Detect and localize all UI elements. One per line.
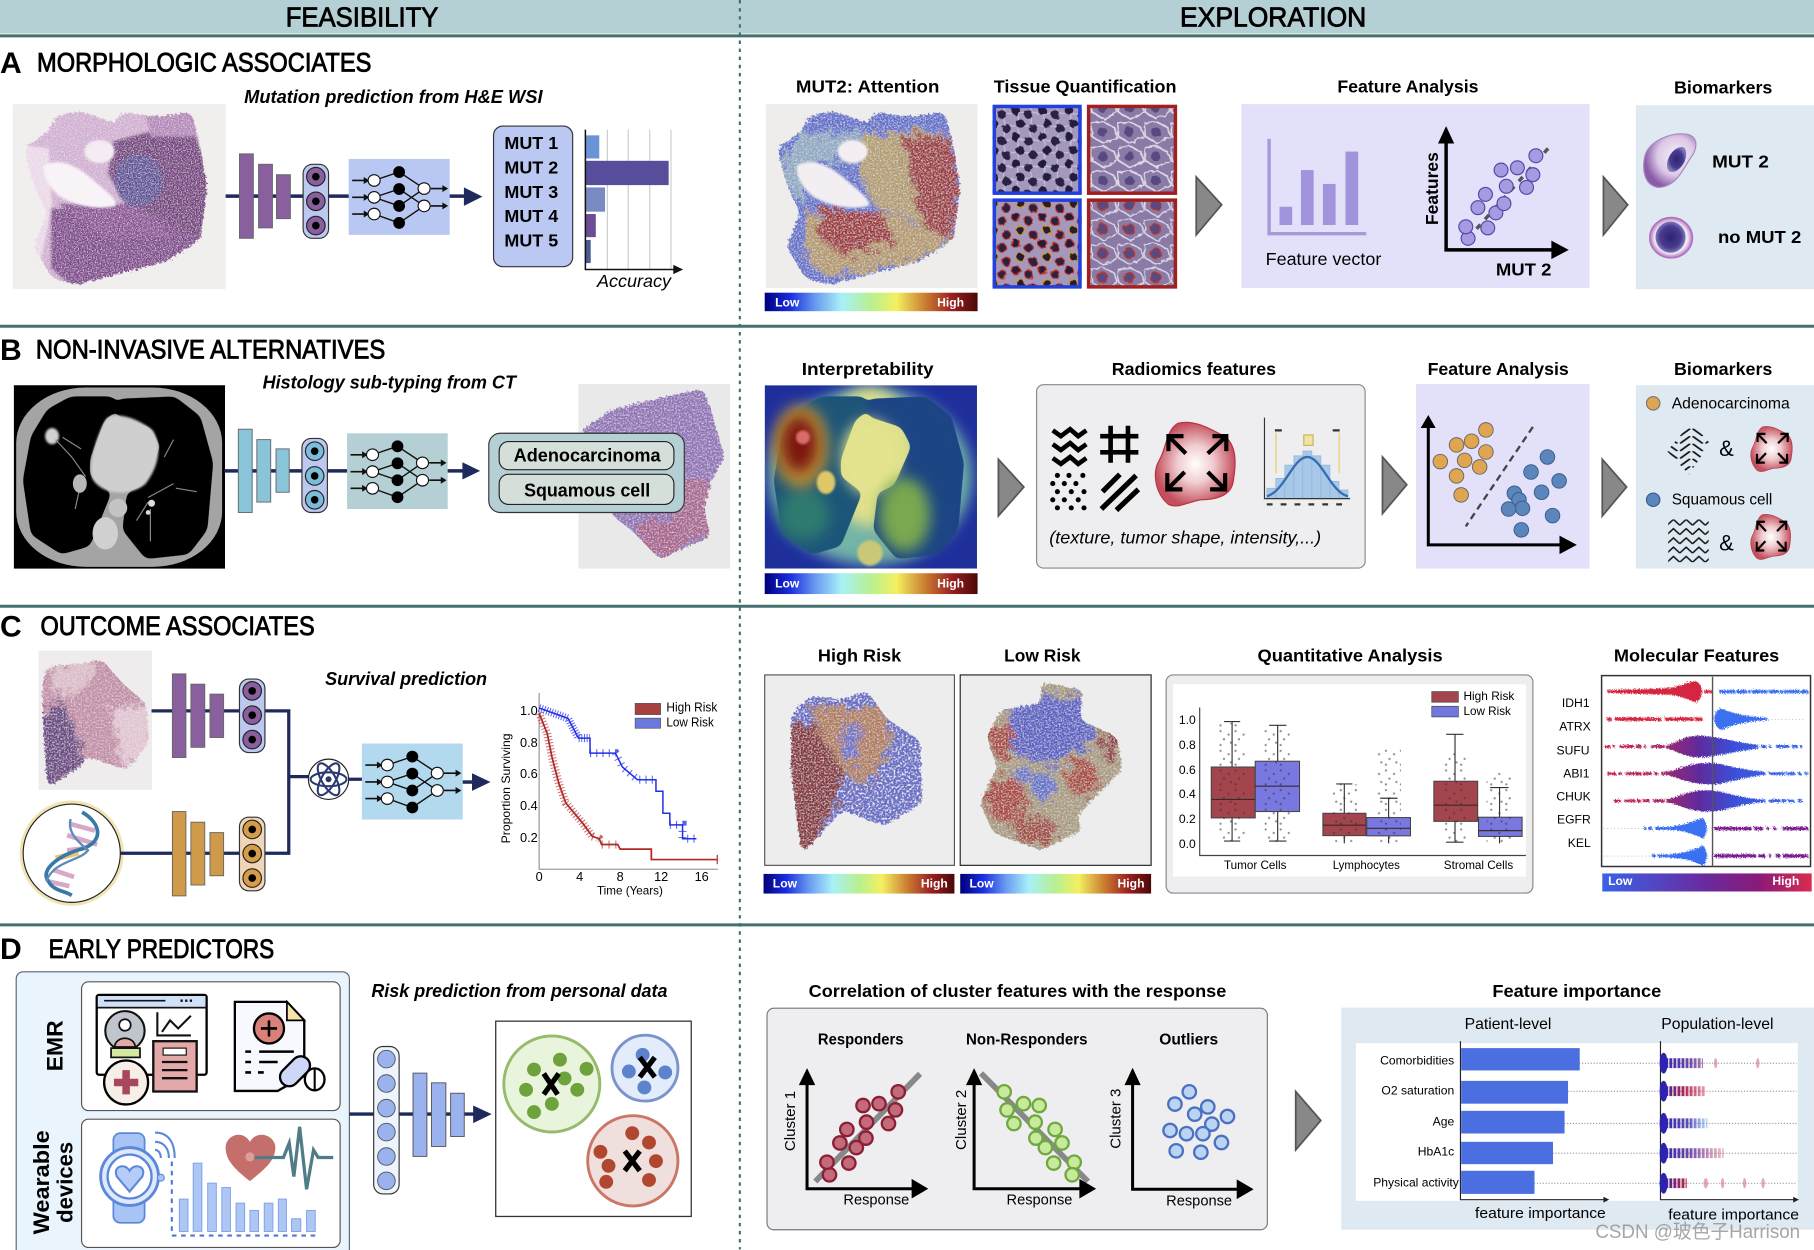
- wearable devices label: Wearable: [29, 1130, 54, 1234]
- colorbar: molecular: Low: [1608, 874, 1633, 888]
- tissue quantification tiles: [983, 77, 1187, 296]
- Kaplan-Meier survival chart: 0.8: [520, 735, 538, 750]
- quantitative analysis box plot: 0.6: [1179, 763, 1196, 777]
- quantitative analysis box plot: Tumor Cells: [1224, 858, 1286, 872]
- personal data container: [16, 972, 349, 1250]
- feature analysis scatter B: Feature Analysis: [1428, 359, 1569, 379]
- quantitative analysis box plot: High Risk: [1463, 689, 1515, 703]
- responders scatter: [782, 1032, 928, 1208]
- panel: C exploration: [764, 646, 1812, 894]
- WSI behind classes: [573, 382, 735, 569]
- panel: B exploration: [765, 359, 1814, 594]
- population-level swarm: feature importance: [1668, 1206, 1799, 1223]
- arrow: [1602, 459, 1627, 516]
- outliers scatter: Outliers: [1159, 1032, 1219, 1049]
- icon: smart watch: [101, 1133, 175, 1223]
- Kaplan-Meier survival chart: 0.6: [520, 766, 538, 781]
- feature analysis panel: Feature Analysis: [1337, 77, 1479, 97]
- patient-level bars: Physical activity: [1373, 1175, 1460, 1189]
- EMR label: EMR: [42, 1020, 67, 1071]
- arrow C: [463, 773, 491, 791]
- header bar: exploration: [739, 0, 1814, 34]
- high risk heatmap: [765, 646, 954, 865]
- non-responders scatter: [953, 1032, 1096, 1208]
- quantitative analysis box plot: 0.8: [1179, 738, 1196, 752]
- wearable devices label line 2: devices: [52, 1142, 77, 1223]
- activity bars: [172, 1161, 318, 1236]
- header bar: feasibility: FEASIBILITY: [286, 2, 438, 33]
- patient-level bars: HbA1c: [1418, 1145, 1454, 1159]
- heading A: A: [0, 47, 22, 80]
- radiomics features panel: (texture, tumor shape, intensity,...): [1049, 528, 1321, 548]
- colorbar: attention: High: [937, 296, 964, 310]
- responders scatter: Response: [843, 1191, 909, 1208]
- non-responders scatter: Cluster 2: [953, 1090, 970, 1150]
- mutation list: MUT 1: [504, 133, 558, 153]
- Kaplan-Meier survival chart: 0: [536, 869, 543, 884]
- arrow: [1382, 457, 1407, 514]
- quantitative analysis box plot: Quantitative Analysis: [1258, 646, 1443, 666]
- CNN encoder D: [349, 1047, 474, 1194]
- arrow A: [464, 187, 482, 206]
- colorbar: molecular: [1602, 873, 1812, 891]
- responders scatter: Responders: [818, 1032, 904, 1049]
- colorbar: interpretability: Low: [775, 577, 800, 591]
- patient-level bars: Comorbidities: [1380, 1053, 1454, 1067]
- adenocarcinoma marker: &: [1719, 436, 1734, 461]
- mutation list: MUT 2: [504, 158, 558, 178]
- header bar: feasibility: [0, 0, 739, 34]
- arrow: [1296, 1092, 1321, 1150]
- Kaplan-Meier survival chart: 0.2: [520, 830, 538, 845]
- wearable panel: [82, 1119, 340, 1247]
- feature analysis scatter B: [1416, 359, 1590, 569]
- quantitative analysis box plot: Stromal Cells: [1444, 858, 1513, 872]
- colorbars: risk maps: Low: [773, 876, 798, 890]
- Kaplan-Meier survival chart: Low Risk: [666, 715, 714, 730]
- colorbar: attention: Low: [775, 296, 800, 310]
- Kaplan-Meier survival chart: Time (Years): [597, 883, 663, 897]
- Kaplan-Meier survival chart: 4: [576, 869, 583, 884]
- adenocarcinoma marker: Adenocarcinoma: [1672, 395, 1790, 412]
- patient-level bars: Age: [1433, 1115, 1454, 1129]
- Kaplan-Meier survival chart: 16: [695, 869, 709, 884]
- mutation list: MUT 4: [504, 206, 558, 226]
- patient-level bars: feature importance: [1475, 1205, 1606, 1222]
- heading A: MORPHOLOGIC ASSOCIATES: [37, 48, 371, 78]
- WSI C: [35, 648, 156, 792]
- tumor shape icon: [1155, 422, 1235, 506]
- clusters box: [496, 1021, 691, 1216]
- subtitle: histology: Histology sub-typing from CT: [263, 372, 518, 393]
- quantitative analysis box plot: [1166, 646, 1533, 893]
- panel: A exploration: [759, 77, 1814, 311]
- colorbar: attention: [765, 293, 978, 311]
- CNN encoder: imaging: [120, 674, 289, 853]
- squamous cell marker: &: [1719, 531, 1734, 556]
- subtitle: mutation prediction: Mutation prediction from H&E WSI: [244, 86, 543, 107]
- non-responders scatter: Response: [1006, 1191, 1072, 1208]
- CNN encoder B: [224, 429, 463, 512]
- scatter: features vs MUT 2: Features: [1422, 152, 1442, 225]
- molecular features swarm plot: [1556, 646, 1811, 866]
- molecular features swarm plot: IDH1: [1562, 696, 1590, 710]
- CNN encoder A: [226, 154, 465, 238]
- colorbars: risk maps: High: [1118, 876, 1145, 890]
- high risk heatmap: High Risk: [818, 646, 901, 666]
- Kaplan-Meier survival chart: 1.0: [520, 703, 538, 718]
- EMR panel: [82, 982, 340, 1111]
- panel: D early predictors, feasibility: [0, 933, 691, 1250]
- quantitative analysis box plot: Low Risk: [1463, 704, 1512, 718]
- colorbar: interpretability: High: [937, 577, 964, 591]
- scatter: features vs MUT 2: [1422, 126, 1569, 279]
- patient-level bars: [1373, 1041, 1799, 1222]
- cell: no MUT 2: [1650, 217, 1801, 258]
- radiomics features panel: Radiomics features: [1112, 359, 1276, 379]
- biomarkers panel B: [1636, 359, 1814, 569]
- accuracy bar chart: Accuracy: [596, 271, 672, 291]
- colorbars: risk maps: Low: [969, 876, 994, 890]
- molecular features swarm plot: SUFU: [1557, 743, 1590, 757]
- Kaplan-Meier survival chart: High Risk: [666, 699, 718, 714]
- arrow B: [462, 462, 480, 480]
- biomarkers panel A: [1636, 78, 1814, 289]
- quantitative analysis box plot: 0.0: [1179, 837, 1196, 851]
- subtitle: survival: Survival prediction: [325, 668, 487, 689]
- neural network B: [347, 433, 448, 509]
- population-level swarm: [1660, 1053, 1799, 1223]
- DNA icon: [22, 803, 121, 904]
- panel: B non-invasive alternatives, feasibility: [0, 334, 735, 569]
- outliers scatter: Response: [1166, 1192, 1232, 1209]
- outliers scatter: [1107, 1032, 1254, 1209]
- panel: C outcome associates, feasibility: [0, 610, 718, 904]
- green cluster: [504, 1036, 600, 1132]
- scatter: features vs MUT 2: MUT 2: [1496, 259, 1551, 279]
- quantitative analysis box plot: Lymphocytes: [1333, 858, 1400, 872]
- heading D: EARLY PREDICTORS: [49, 934, 274, 964]
- tissue quantification tiles: Tissue Quantification: [994, 77, 1177, 97]
- quantitative analysis box plot: 0.4: [1179, 787, 1196, 801]
- arrow: [998, 459, 1024, 516]
- colorbars: risk maps: [764, 874, 1151, 894]
- quantitative analysis box plot: 0.2: [1179, 812, 1196, 826]
- molecular features swarm plot: EGFR: [1557, 813, 1591, 827]
- feature importance panel: Feature importance: [1492, 981, 1661, 1001]
- molecular features swarm plot: ABI1: [1563, 766, 1590, 780]
- mutation list: MUT 5: [504, 230, 558, 250]
- feature importance panel: Patient-level: [1465, 1016, 1551, 1033]
- accuracy bar chart: [585, 130, 683, 291]
- quantitative analysis box plot: 1.0: [1179, 713, 1196, 727]
- arrow: [1196, 177, 1222, 235]
- class labels: Squamous cell: [524, 479, 650, 500]
- cell: no MUT 2: no MUT 2: [1718, 227, 1801, 247]
- arrow D: [473, 1106, 492, 1123]
- heading C: C: [0, 610, 22, 643]
- correlation panel: [767, 981, 1267, 1230]
- blue cluster: [612, 1035, 678, 1101]
- attention map: MUT2: Attention: [796, 77, 939, 97]
- heading D: D: [0, 933, 22, 966]
- class labels: [489, 433, 684, 512]
- adenocarcinoma marker: [1646, 395, 1792, 474]
- subtitle: risk prediction: Risk prediction from personal data: [371, 980, 668, 1001]
- low risk heatmap: Low Risk: [1004, 646, 1081, 666]
- molecular features swarm plot: ATRX: [1559, 720, 1591, 734]
- patient-level bars: O2 saturation: [1381, 1083, 1454, 1097]
- squamous cell marker: [1646, 491, 1791, 562]
- heading C: OUTCOME ASSOCIATES: [40, 611, 315, 641]
- icon: health record window: [97, 995, 207, 1104]
- interpretability heatmap: Interpretability: [802, 359, 934, 379]
- attention map: [759, 77, 979, 295]
- feature importance panel: [1341, 981, 1814, 1230]
- CNN encoder: genomics: [172, 812, 265, 896]
- fusion atom icon: [289, 759, 362, 799]
- low risk heatmap: [960, 646, 1151, 865]
- watermark: CSDN @玻色子Harrison: [1595, 1221, 1800, 1243]
- colorbar: molecular: High: [1772, 874, 1799, 888]
- colorbars: risk maps: High: [921, 876, 948, 890]
- outliers scatter: Cluster 3: [1107, 1089, 1124, 1149]
- mutation list: [494, 126, 573, 267]
- CT scan: [14, 385, 225, 569]
- feature analysis panel: [1241, 77, 1590, 288]
- molecular features swarm plot: CHUK: [1556, 790, 1591, 804]
- class labels: Adenocarcinoma: [514, 445, 661, 466]
- neural network C: [362, 744, 463, 820]
- heading D: [0, 933, 274, 966]
- cell: MUT 2: MUT 2: [1712, 152, 1769, 172]
- panel: D exploration: [767, 981, 1814, 1230]
- H&E whole slide image: [13, 104, 226, 289]
- intensity histogram: [1264, 418, 1350, 504]
- heading B: NON-INVASIVE ALTERNATIVES: [36, 335, 385, 365]
- feature vector bars: Feature vector: [1266, 249, 1382, 269]
- mutation list: MUT 3: [504, 182, 558, 202]
- texture icons: [1050, 426, 1138, 510]
- molecular features swarm plot: KEL: [1568, 836, 1591, 850]
- heading B: B: [0, 334, 22, 367]
- interpretability heatmap: [765, 359, 977, 569]
- Kaplan-Meier survival chart: Proportion Surviving: [499, 733, 513, 843]
- feature importance panel: Population-level: [1661, 1016, 1774, 1033]
- arrow: [1603, 177, 1628, 235]
- radiomics features panel: [1037, 359, 1365, 568]
- header bar: exploration: EXPLORATION: [1180, 2, 1366, 33]
- Kaplan-Meier survival chart: [499, 693, 718, 897]
- red cluster: [588, 1116, 678, 1206]
- Kaplan-Meier survival chart: 0.4: [520, 798, 538, 813]
- icon: heart with ECG: [226, 1127, 333, 1189]
- correlation panel: Correlation of cluster features with the response: [809, 981, 1226, 1001]
- colorbar: interpretability: [765, 573, 978, 594]
- molecular features swarm plot: Molecular Features: [1614, 646, 1779, 666]
- biomarkers panel A: Biomarkers: [1674, 78, 1772, 98]
- neural network A: [349, 159, 450, 235]
- biomarkers panel B: Biomarkers: [1674, 359, 1772, 379]
- responders scatter: Cluster 1: [782, 1091, 799, 1151]
- feature vector bars: [1266, 139, 1382, 269]
- cell: MUT 2: [1644, 134, 1769, 187]
- Kaplan-Meier survival chart: 12: [654, 869, 668, 884]
- icon: prescription document: [235, 1002, 325, 1091]
- Kaplan-Meier survival chart: 8: [617, 869, 624, 884]
- non-responders scatter: Non-Responders: [966, 1032, 1088, 1049]
- squamous cell marker: Squamous cell: [1672, 491, 1772, 508]
- panel: A morphologic associates, feasibility: [0, 47, 683, 291]
